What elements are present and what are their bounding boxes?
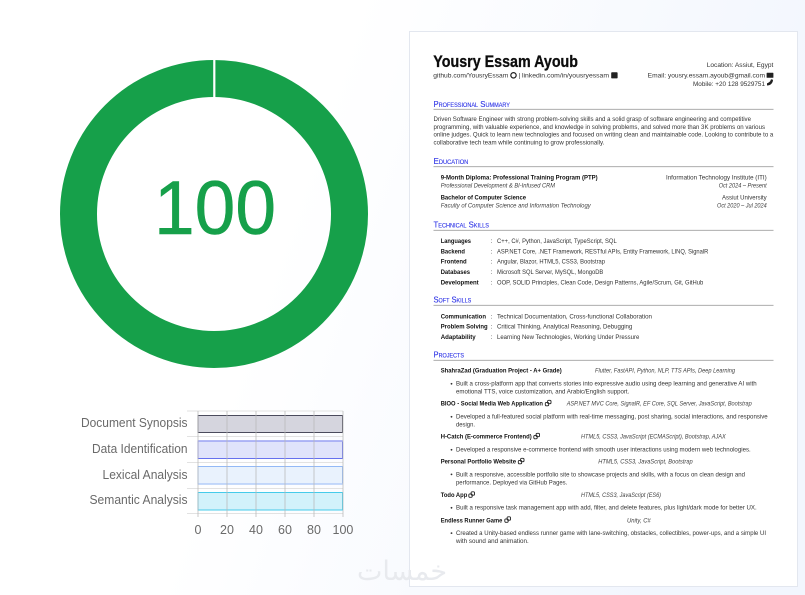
section: professional summary: online judges. Quick to learn new technologies and focused on writing clean and maintainable code. Looking to contribute to a bbox=[434, 132, 774, 138]
value axis labels: 80 bbox=[307, 523, 321, 537]
project: Endless Runner Game bbox=[441, 517, 766, 545]
section: technical skills: Backend bbox=[441, 248, 465, 255]
value axis labels: 40 bbox=[249, 523, 263, 537]
section: professional summary: programming, with valuable experience, and knowledge in solving problems, and solved more than 3K problems on various bbox=[434, 124, 766, 131]
section: soft skills: Critical Thinking, Analytical Reasoning, Debugging bbox=[497, 324, 633, 331]
project: Todo App: Built a responsive task management app with add, filter, and delete features, plus light/dark mode for better UX. bbox=[456, 505, 757, 512]
icon: envelope bbox=[767, 73, 773, 78]
resume header: | bbox=[519, 73, 521, 80]
section: technical skills: : bbox=[490, 248, 492, 255]
project: Todo App: Todo App bbox=[441, 492, 467, 499]
score number: 100 bbox=[154, 166, 276, 251]
project: BIOO: Developed a full-featured social platform with real-time messaging, post sharing, social interactions, and responsive bbox=[456, 414, 768, 421]
resume header: Yousry Essam Ayoub bbox=[433, 53, 578, 71]
icon: phone bbox=[767, 79, 773, 86]
value axis labels: 0 bbox=[194, 523, 202, 537]
section: soft skills bbox=[434, 295, 774, 341]
value axis labels: 60 bbox=[278, 523, 292, 537]
resume header: Location: Assiut, Egypt bbox=[707, 62, 774, 69]
section: technical skills: Development bbox=[441, 279, 479, 286]
section: soft skills: : bbox=[490, 334, 492, 341]
bar: Semantic Analysis bbox=[198, 492, 342, 510]
project: ShahraZad: Flutter, FastAPI, Python, NLP, TTS APIs, Deep Learning bbox=[595, 368, 735, 375]
resume header: Email: yousry.essam.ayoub@gmail.com bbox=[648, 73, 766, 80]
section: education: Faculty of Computer Science and Information Technology bbox=[441, 203, 591, 210]
value axis labels: 20 bbox=[220, 523, 234, 537]
resume header: linkedin.com/in/yousryessam bbox=[522, 73, 610, 80]
project: Endless Runner Game: with sound and animation. bbox=[455, 538, 529, 545]
project: ShahraZad: ShahraZad (Graduation Project - A+ Grade) bbox=[441, 368, 562, 375]
section: soft skills: Adaptability bbox=[441, 334, 476, 341]
value axis labels bbox=[194, 523, 353, 537]
resume header bbox=[433, 53, 774, 88]
section: education: Oct 2020 – Jul 2024 bbox=[717, 203, 767, 210]
project: Endless Runner Game: Created a Unity-based endless runner game with lane-switching, obstacles, collectibles, power-ups, and a simple UI bbox=[456, 530, 766, 537]
project: Personal Portfolio Website: performance. Deployed via GitHub Pages. bbox=[456, 479, 567, 486]
section: technical skills: Technical Skills bbox=[434, 220, 489, 230]
section: professional summary: collaborative tech team while continuing to grow professionally. bbox=[434, 139, 604, 146]
watermark: خمسات bbox=[357, 556, 447, 587]
project: H-Catch: Developed a responsive e-commerce frontend with smooth user interactions using modern web technologies. bbox=[456, 447, 751, 454]
project: H-Catch: H-Catch (E-commerce Frontend) bbox=[441, 434, 532, 441]
section: education: Assiut University bbox=[722, 195, 767, 202]
project: BIOO: ASP.NET MVC Core, SignalR, EF Core, SQL Server, JavaScript, Bootstrap bbox=[566, 401, 752, 408]
section: professional summary bbox=[434, 99, 774, 146]
icon: link bbox=[534, 433, 540, 439]
icon: github bbox=[511, 73, 516, 78]
project: ShahraZad bbox=[441, 368, 757, 395]
icon: link bbox=[545, 400, 551, 406]
bar chart: analysis categories bbox=[81, 411, 353, 537]
project: ShahraZad: Built a cross-platform app that converts stories into expressive audio using deep learning and generative AI with bbox=[456, 381, 757, 388]
section: technical skills: Languages bbox=[441, 238, 471, 245]
category labels: Data Identification bbox=[92, 442, 188, 456]
project: Endless Runner Game: Endless Runner Game bbox=[441, 517, 503, 524]
project: Personal Portfolio Website bbox=[441, 458, 745, 486]
section: technical skills: ASP.NET Core, .NET Framework, RESTful APIs, Entity Framework, LINQ, SignalR bbox=[497, 248, 709, 255]
section: technical skills: : bbox=[490, 269, 492, 276]
project: BIOO bbox=[441, 400, 768, 428]
section: technical skills: C++, C#, Python, JavaScript, TypeScript, SQL bbox=[497, 238, 617, 245]
section: projects bbox=[434, 349, 774, 545]
section: soft skills: : bbox=[490, 313, 492, 320]
section: professional summary: Professional Summary bbox=[434, 99, 510, 109]
value axis labels: 100 bbox=[332, 523, 353, 537]
section: technical skills: Microsoft SQL Server, MySQL, MongoDB bbox=[497, 269, 604, 276]
project: Personal Portfolio Website: HTML5, CSS3, JavaScript, Bootstrap bbox=[598, 459, 693, 466]
project: Personal Portfolio Website: Built a responsive, accessible portfolio site to showcase projects and skills, with a focus on clean design and bbox=[456, 471, 745, 478]
section: education bbox=[434, 156, 774, 210]
project: Todo App bbox=[441, 492, 757, 512]
section: technical skills: Frontend bbox=[441, 259, 467, 266]
section: soft skills: Soft Skills bbox=[434, 295, 471, 305]
section: technical skills: : bbox=[490, 259, 492, 266]
section: projects: Projects bbox=[434, 349, 464, 359]
bar: Data Identification bbox=[198, 441, 343, 458]
section: technical skills: OOP, SOLID Principles, Clean Code, Design Patterns, Agile/Scrum, Git, GitHub bbox=[497, 279, 704, 286]
category labels: Semantic Analysis bbox=[90, 493, 188, 507]
section: soft skills: : bbox=[490, 324, 492, 331]
category labels bbox=[81, 416, 188, 507]
icon: link bbox=[505, 517, 510, 522]
section: technical skills: : bbox=[490, 238, 492, 245]
section: technical skills: Databases bbox=[441, 269, 470, 276]
project: BIOO: BIOO - Social Media Web Application bbox=[441, 401, 543, 408]
section: education: Oct 2024 – Present bbox=[719, 182, 768, 189]
resume header: github.com/YousryEssam bbox=[433, 73, 509, 80]
bar: Document Synopsis bbox=[198, 416, 342, 432]
project: Personal Portfolio Website: Personal Portfolio Website bbox=[441, 459, 516, 466]
section: technical skills bbox=[434, 220, 774, 286]
section: education: Bachelor of Computer Science bbox=[441, 195, 526, 202]
project: H-Catch: HTML5, CSS3, JavaScript (ECMAScript), Bootstrap, AJAX bbox=[581, 434, 726, 441]
project: H-Catch bbox=[441, 433, 751, 454]
donut chart: score 100 bbox=[78, 58, 350, 350]
icon: linkedin bbox=[611, 72, 618, 78]
icon: link bbox=[469, 492, 474, 497]
section: education: Professional Development & BI-Infused CRM bbox=[441, 182, 555, 189]
icon: link bbox=[518, 458, 524, 464]
section: professional summary: Driven Software Engineer with strong problem-solving skills and a solid grasp of software engineering and competitive bbox=[434, 116, 751, 123]
project: ShahraZad: emotional TTS, voice customization, and Arabic/English support. bbox=[456, 388, 629, 395]
bar: Lexical Analysis bbox=[198, 466, 343, 484]
section: soft skills: Communication bbox=[441, 313, 486, 320]
section: education: Education bbox=[434, 156, 468, 166]
section: education: Information Technology Institute (ITI) bbox=[666, 175, 767, 182]
project: Todo App: HTML5, CSS3, JavaScript (ES6) bbox=[581, 492, 661, 499]
resume header: Mobile: +20 128 9529751 bbox=[693, 81, 765, 88]
category labels: Lexical Analysis bbox=[102, 468, 188, 482]
panel: resume page bbox=[410, 32, 798, 586]
section: soft skills: Learning New Technologies, Working Under Pressure bbox=[497, 334, 640, 341]
section: soft skills: Problem Solving bbox=[441, 324, 488, 331]
section: technical skills: Angular, Blazor, HTML5, CSS3, Bootstrap bbox=[497, 259, 605, 266]
project: Endless Runner Game: Unity, C# bbox=[627, 517, 651, 524]
section: education: 9-Month Diploma: Professional Training Program (PTP) bbox=[441, 175, 598, 182]
section: soft skills: Technical Documentation, Cross-functional Collaboration bbox=[497, 313, 652, 320]
section: technical skills: : bbox=[490, 279, 492, 286]
project: BIOO: design. bbox=[456, 421, 475, 428]
category labels: Document Synopsis bbox=[81, 416, 188, 430]
